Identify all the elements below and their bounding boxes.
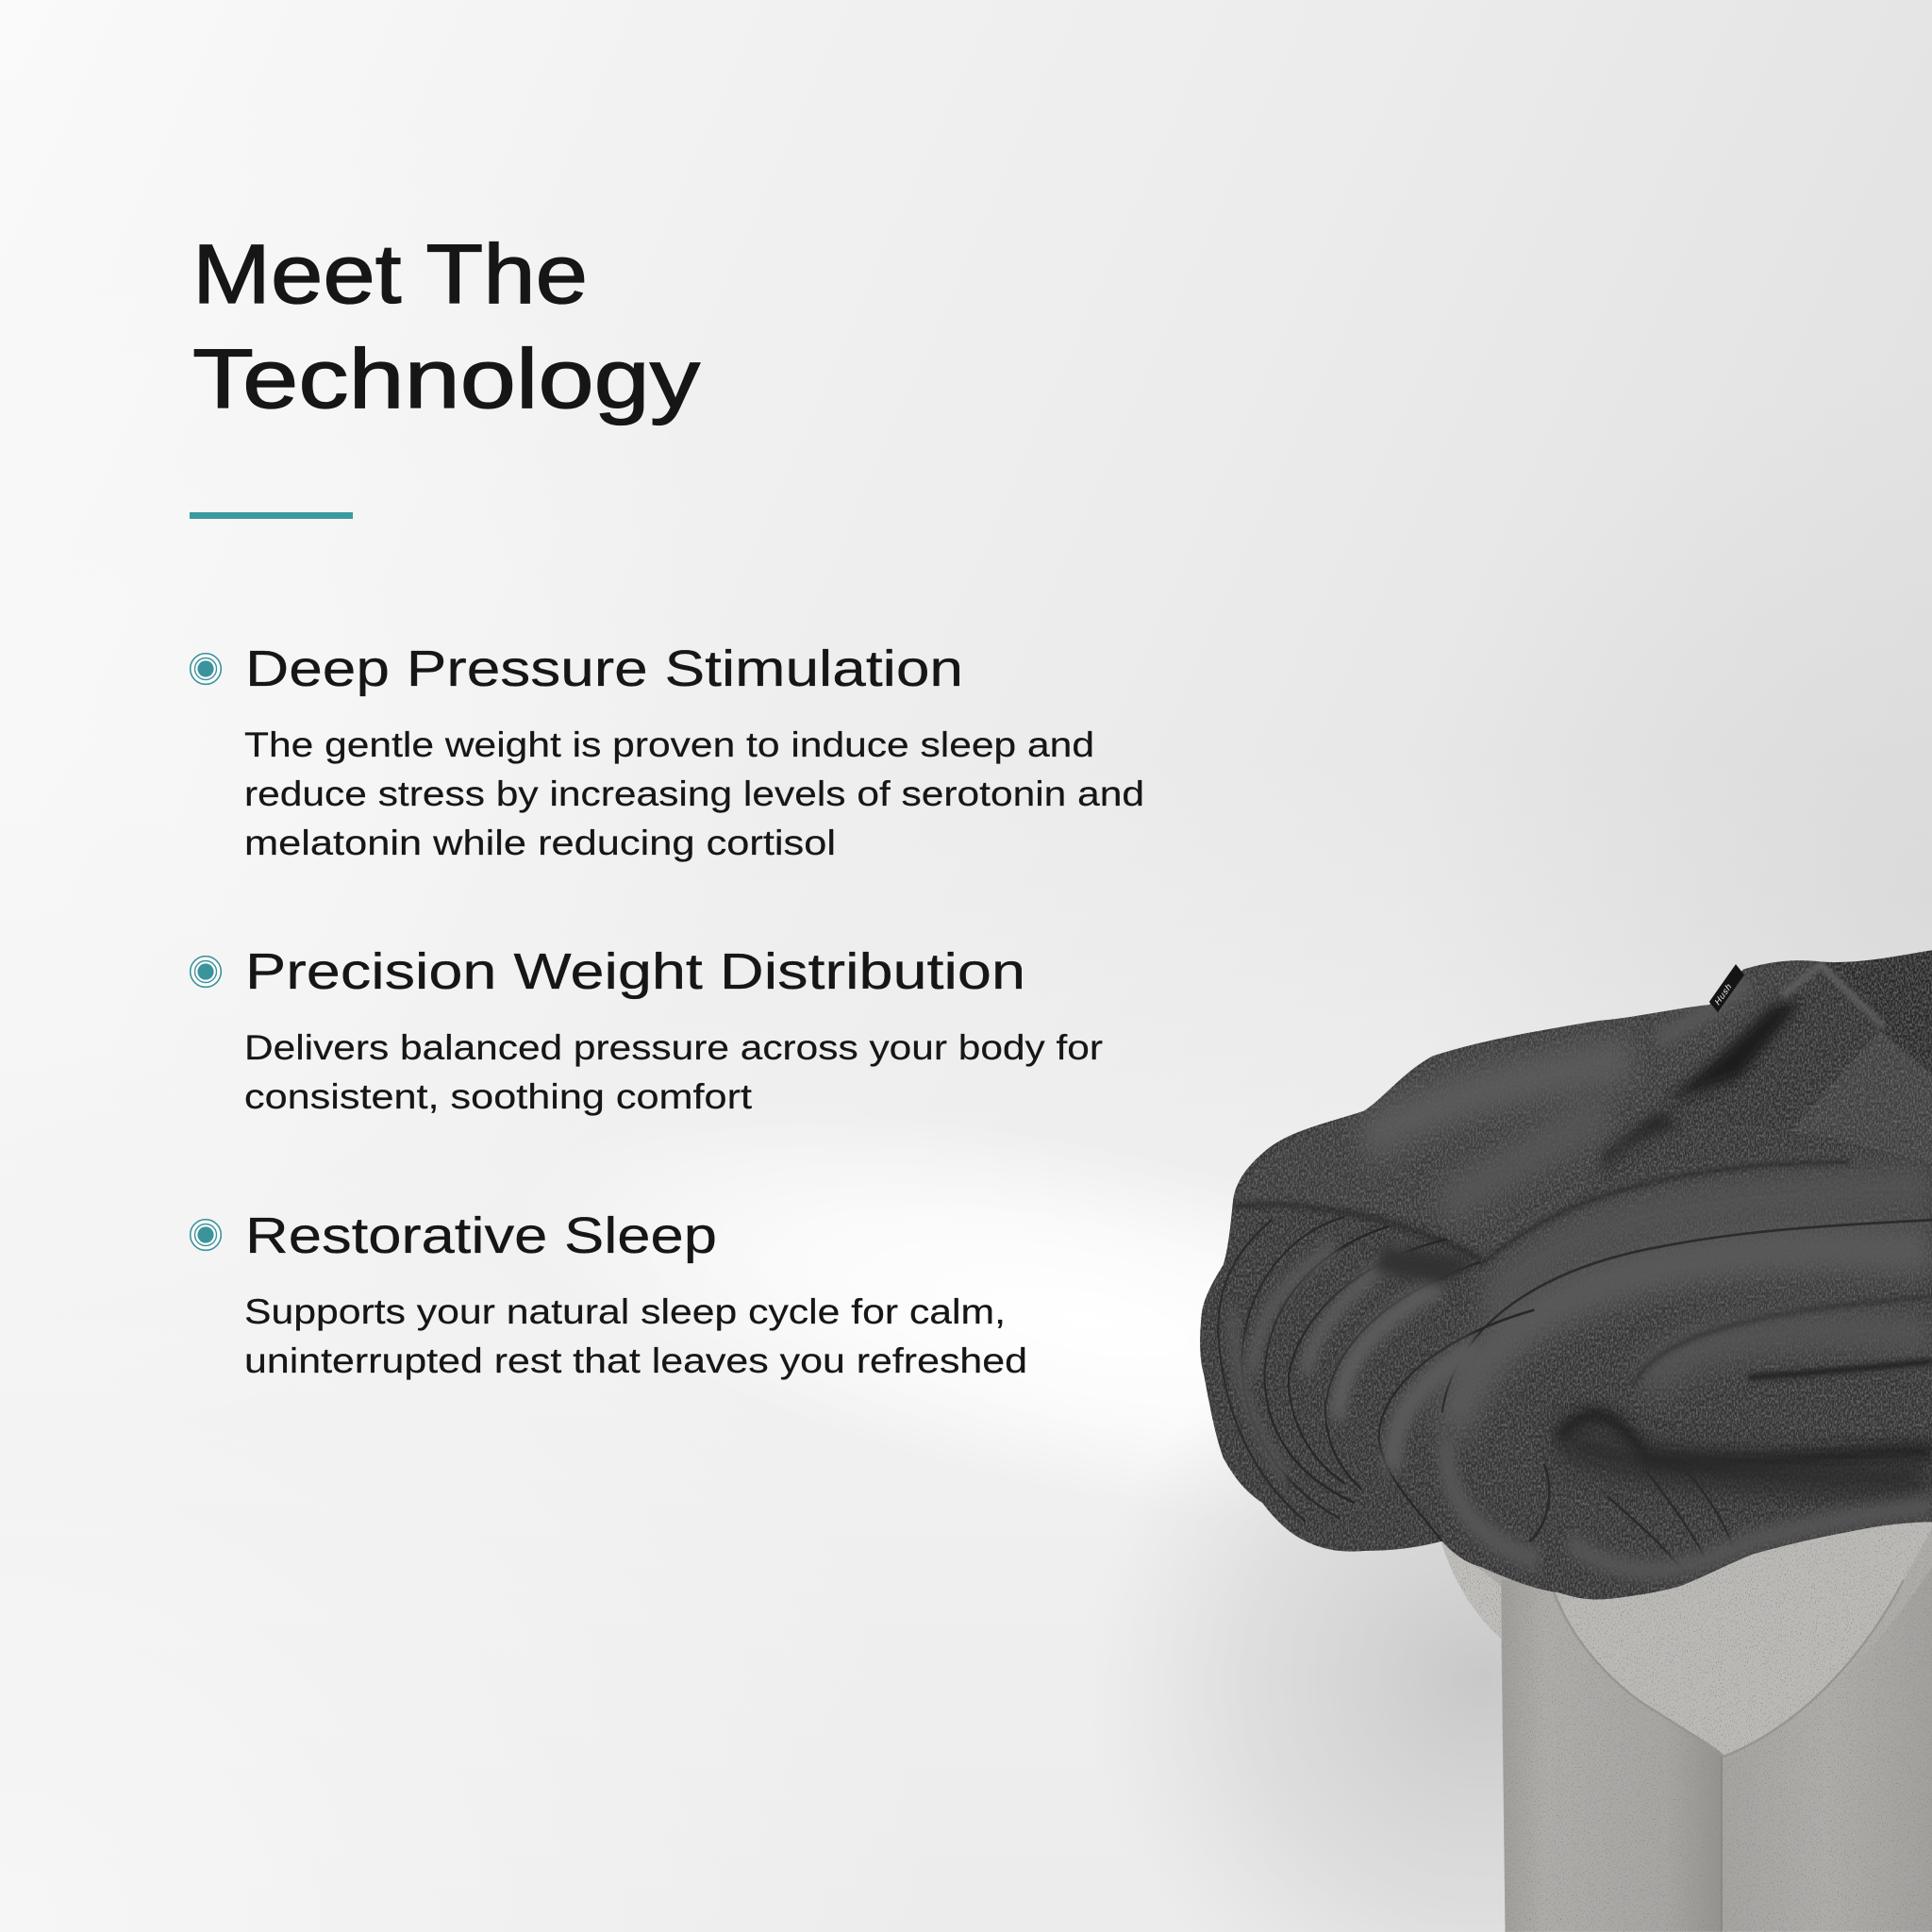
teal accent rule xyxy=(190,512,353,519)
icon: teal target bullet xyxy=(191,1220,221,1250)
heading: Meet The Technology: Technology xyxy=(192,331,701,425)
feature description: uninterrupted rest that leaves you refreshed xyxy=(244,1341,1027,1380)
blanket brand tag xyxy=(1709,964,1744,1012)
icon: teal target bullet xyxy=(191,957,221,987)
big roll highlight xyxy=(1486,1188,1932,1304)
feature description: Delivers balanced pressure across your body for xyxy=(244,1028,1103,1067)
feature description: The gentle weight is proven to induce sleep and xyxy=(244,725,1094,764)
concrete pedestal xyxy=(1440,1503,1932,1932)
upper flap of blanket xyxy=(1807,979,1813,983)
feature heading: Precision Weight Distribution xyxy=(245,943,1025,1000)
left quilted ribs xyxy=(1289,1240,1447,1483)
feature description: reduce stress by increasing levels of serotonin and xyxy=(244,774,1144,813)
soft folds and highlights xyxy=(1218,964,1932,1574)
icon: teal target bullet xyxy=(191,654,221,684)
illustration: weighted blanket on concrete pedestal xyxy=(1190,938,1932,1932)
feature description xyxy=(244,725,1144,862)
feature description: consistent, soothing comfort xyxy=(244,1077,753,1116)
feature heading: Restorative Sleep xyxy=(245,1208,717,1264)
blanket brand tag: Hush xyxy=(1713,981,1734,1008)
feature: Deep Pressure Stimulation xyxy=(191,641,1144,862)
feature description: Supports your natural sleep cycle for calm, xyxy=(244,1292,1006,1331)
feature: Precision Weight Distribution xyxy=(191,943,1103,1116)
feature description xyxy=(244,1028,1103,1116)
heading: Meet The Technology xyxy=(192,226,701,425)
feature description: melatonin while reducing cortisol xyxy=(244,824,836,862)
feature description xyxy=(244,1292,1027,1380)
blanket xyxy=(1190,938,1932,1618)
feature: Restorative Sleep xyxy=(191,1208,1027,1380)
feature heading: Deep Pressure Stimulation xyxy=(245,641,963,697)
heading: Meet The Technology: Meet The xyxy=(192,226,588,321)
